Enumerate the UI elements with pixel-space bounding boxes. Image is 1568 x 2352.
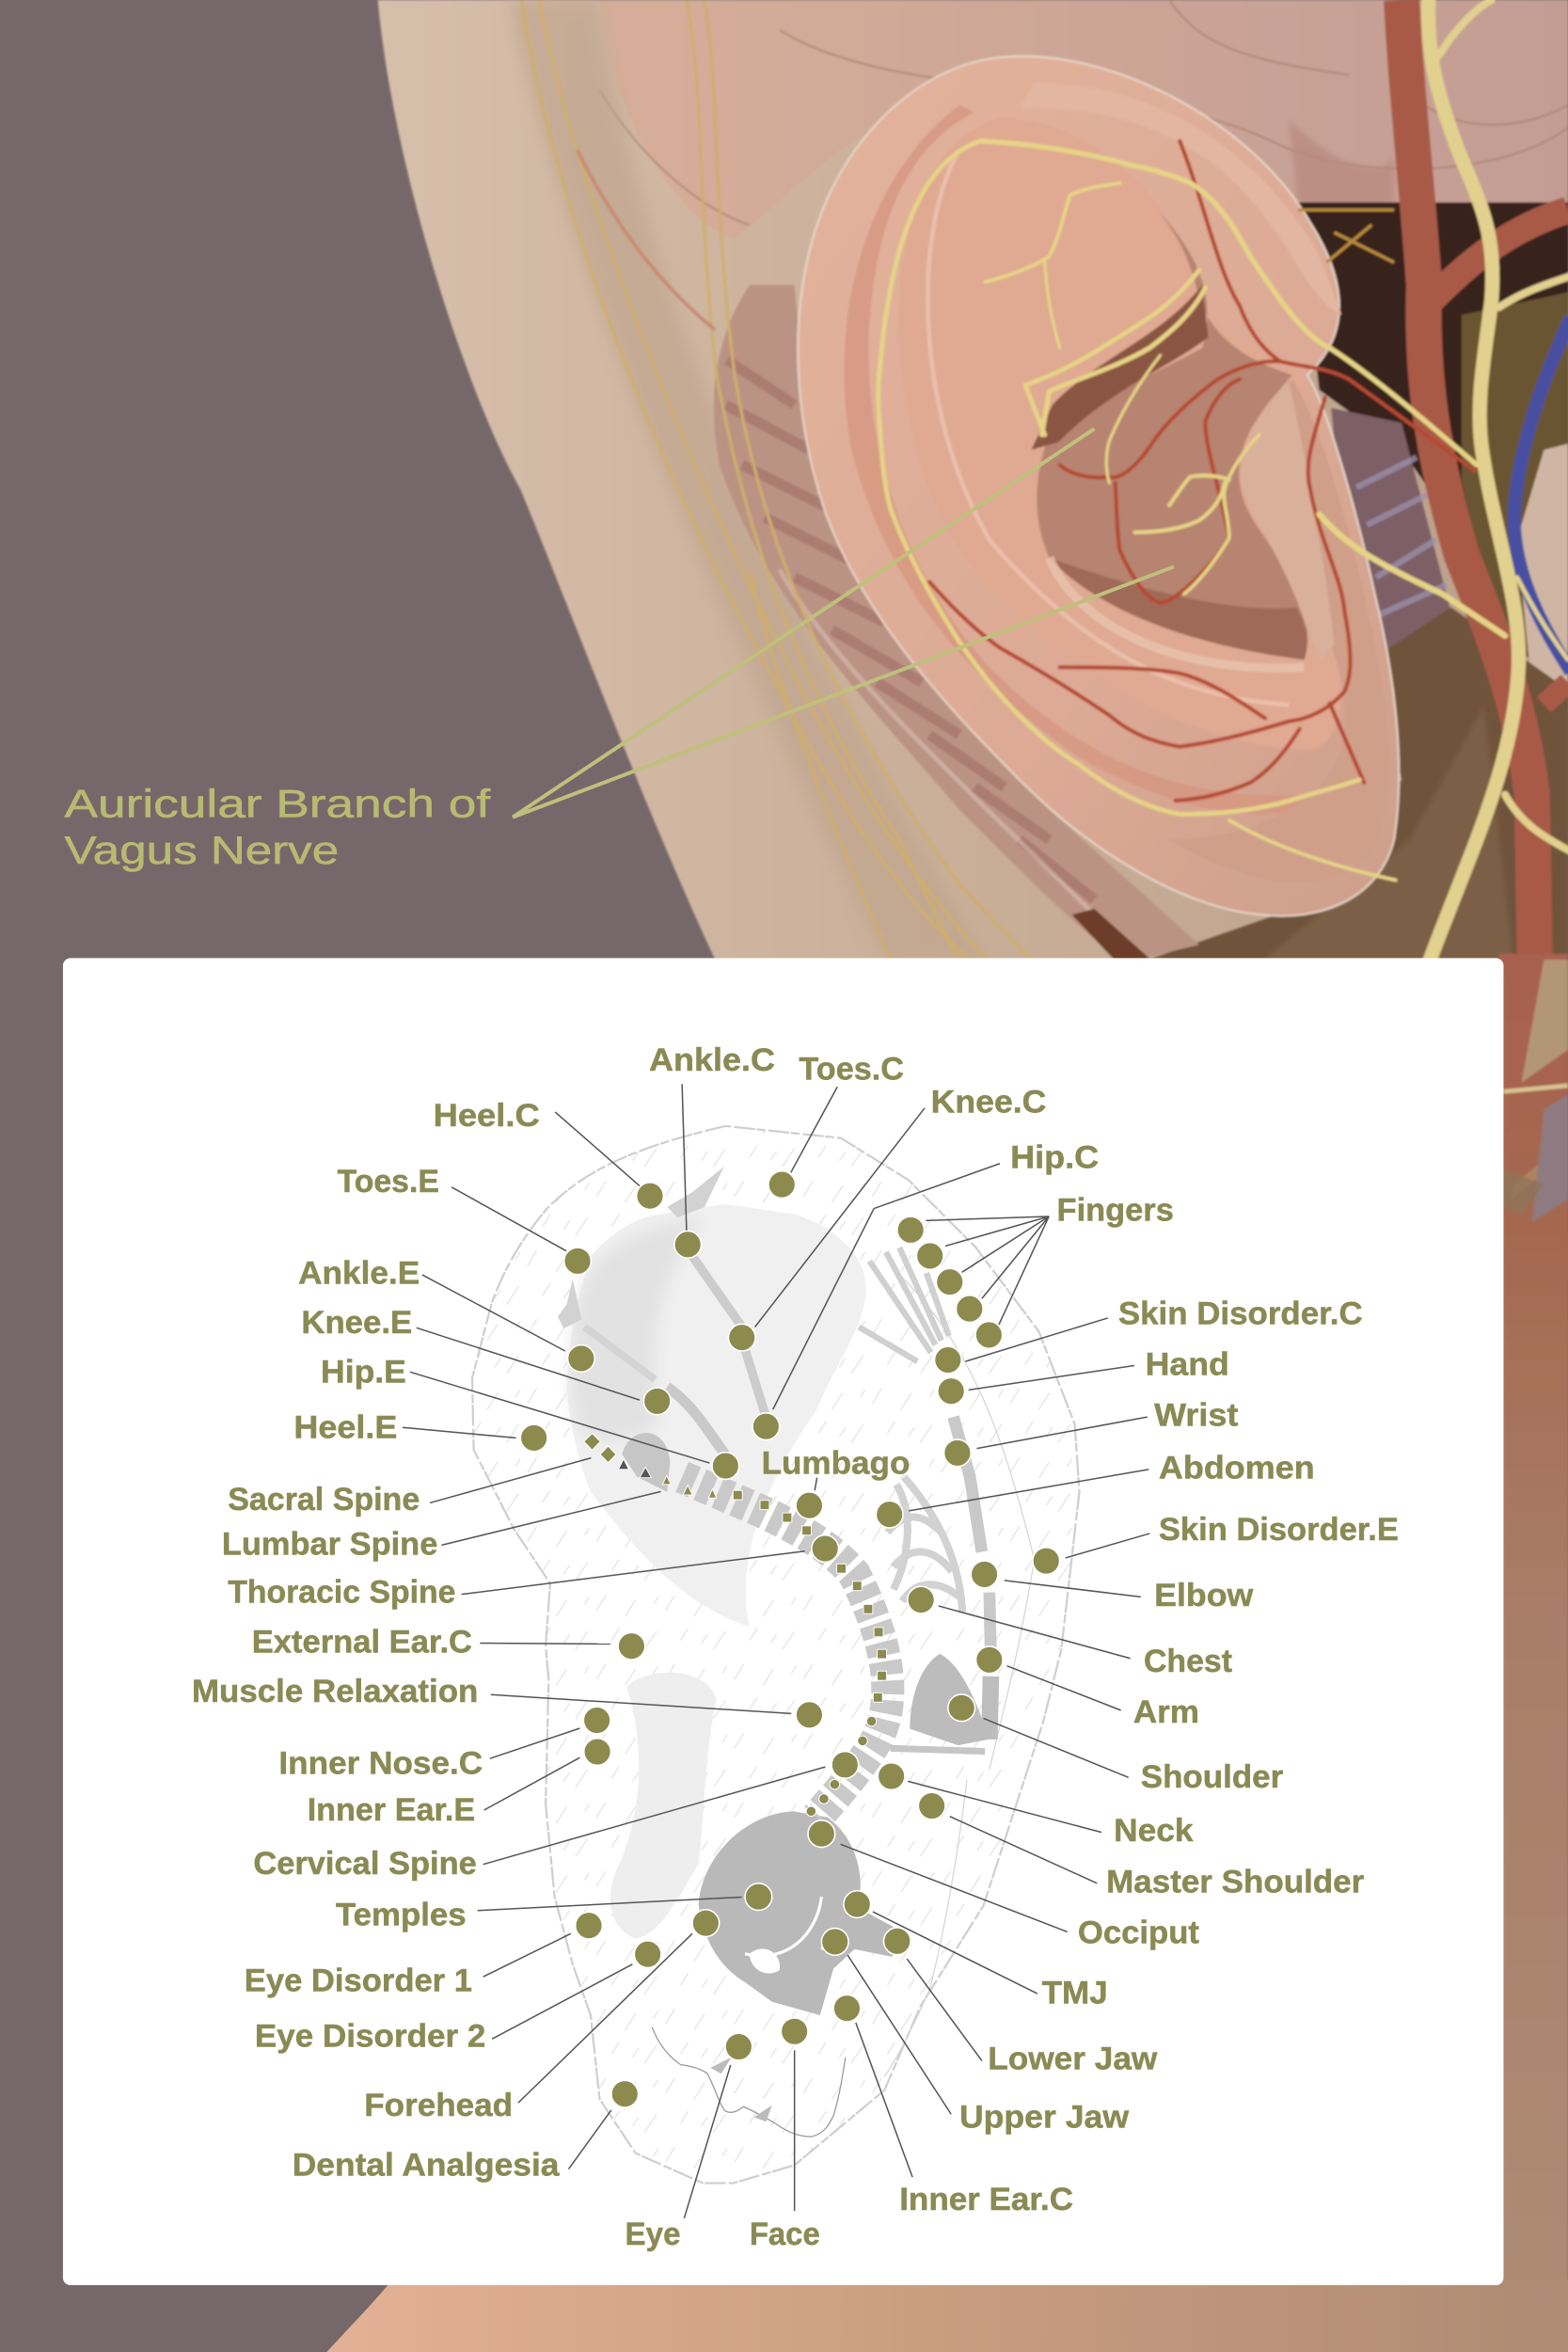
label: Abdomen — [876, 1450, 1315, 1528]
label: Knee.C: Knee.C — [931, 1085, 1046, 1120]
label: Master Shoulder: Master Shoulder — [1106, 1864, 1364, 1899]
label: TMJ: TMJ — [1042, 1975, 1108, 2010]
outer ear outline — [472, 1126, 1079, 2184]
ear sketch — [472, 1126, 1079, 2184]
label: Chest — [908, 1586, 1232, 1679]
label: Hip.C — [752, 1140, 1099, 1440]
label: Eye Disorder 1: Eye Disorder 1 — [245, 1963, 472, 1999]
label: Toes.E: Toes.E — [338, 1164, 439, 1200]
callout lines — [513, 429, 1174, 818]
label: Shoulder: Shoulder — [1141, 1759, 1283, 1795]
shaded antitragus area — [610, 1673, 717, 1939]
label: Fingers — [897, 1192, 1174, 1348]
label: Knee.E — [301, 1305, 671, 1415]
shoulder skin — [326, 2280, 1568, 2352]
right tissue strip — [1499, 954, 1568, 2288]
label: Face: Face — [750, 2217, 820, 2252]
right ear rim — [1169, 379, 1389, 882]
label: Elbow — [971, 1561, 1254, 1613]
label: Muscle Relaxation — [192, 1674, 823, 1728]
label: Master Shoulder — [918, 1792, 1364, 1899]
label: Eye Disorder 1 — [245, 1912, 602, 1999]
label: Sacral Spine — [228, 1458, 591, 1518]
label: Lumbago: Lumbago — [762, 1446, 910, 1482]
label: Lumbar Spine: Lumbar Spine — [222, 1527, 437, 1563]
neck skin — [378, 0, 1568, 962]
label: Heel.E — [293, 1409, 547, 1452]
label: Lower Jaw: Lower Jaw — [988, 2041, 1158, 2076]
label: Elbow: Elbow — [1154, 1578, 1254, 1613]
label: Neck: Neck — [1114, 1813, 1195, 1849]
label: Ankle.E — [298, 1255, 594, 1372]
concha — [1037, 210, 1307, 660]
label: Temples — [336, 1883, 772, 1932]
neck nerves — [522, 0, 1035, 962]
label: Toes.C — [768, 1052, 904, 1198]
label: Eye Disorder 2 — [255, 1941, 661, 2055]
callout title — [65, 782, 491, 872]
striped muscle behind ear — [1331, 408, 1451, 660]
blue vein — [1514, 318, 1568, 672]
label: Face — [750, 2018, 820, 2252]
label: Lower Jaw — [883, 1928, 1158, 2076]
label: Hand: Hand — [1146, 1346, 1229, 1382]
label: Inner Ear.E: Inner Ear.E — [308, 1792, 475, 1828]
striped muscle beneath ear — [714, 285, 1199, 962]
label: Heel.E: Heel.E — [293, 1409, 397, 1445]
label: Dental Analgesia: Dental Analgesia — [293, 2148, 560, 2184]
panel background — [63, 958, 1503, 2285]
ear arteries — [929, 141, 1475, 801]
upper foot — [667, 1167, 724, 1217]
label: Hand — [938, 1346, 1229, 1405]
label: Inner Ear.E — [308, 1739, 610, 1828]
label: Forehead — [364, 1910, 720, 2123]
label: Upper Jaw — [821, 1929, 1129, 2136]
label: Neck — [878, 1763, 1195, 1849]
label: Abdomen: Abdomen — [1159, 1450, 1315, 1486]
label: Cervical Spine: Cervical Spine — [253, 1846, 477, 1882]
lower leg bones — [667, 1387, 730, 1462]
label: Inner Ear.C — [833, 1994, 1073, 2217]
ear nerves — [879, 141, 1505, 881]
label: Knee.C — [728, 1085, 1046, 1351]
label: Arm: Arm — [1133, 1694, 1199, 1730]
spine markers — [584, 1434, 887, 1817]
gold-brown tissue — [1462, 293, 1568, 675]
label: Ankle.C: Ankle.C — [649, 1042, 775, 1078]
skeleton — [558, 1167, 990, 2015]
label: Heel.C: Heel.C — [434, 1098, 540, 1134]
panel: auricular points chart — [63, 958, 1503, 2285]
label: Cervical Spine — [253, 1752, 859, 1882]
lower brown tissue — [1139, 607, 1568, 962]
label: TMJ — [844, 1891, 1108, 2010]
tragus highlight — [1241, 382, 1334, 660]
label: Toes.C: Toes.C — [799, 1052, 904, 1088]
label: Thoracic Spine — [228, 1535, 839, 1611]
label: Thoracic Spine: Thoracic Spine — [228, 1575, 455, 1611]
label: Dental Analgesia — [293, 2080, 639, 2184]
label: Sacral Spine: Sacral Spine — [228, 1482, 420, 1518]
label: Fingers: Fingers — [1057, 1192, 1174, 1228]
face skin — [599, 0, 1568, 240]
label: Muscle Relaxation: Muscle Relaxation — [192, 1674, 478, 1709]
ear hatching — [472, 1126, 1079, 2184]
label: Heel.C — [434, 1098, 663, 1210]
label: Lumbago — [762, 1446, 910, 1518]
ear — [798, 56, 1399, 916]
label: Inner Ear.C: Inner Ear.C — [899, 2182, 1073, 2217]
label: Hip.E — [321, 1354, 739, 1479]
label: Knee.E: Knee.E — [301, 1305, 412, 1341]
label: External Ear.C — [252, 1624, 645, 1660]
label: Occiput — [808, 1820, 1199, 1951]
concha dark fold — [1031, 285, 1209, 450]
upper ear bowl — [899, 117, 1341, 750]
label: Toes.E — [338, 1164, 591, 1275]
spine — [682, 1477, 888, 1818]
clavicle — [891, 1748, 985, 1752]
label: Wrist — [944, 1398, 1238, 1467]
label: Skin Disorder.C: Skin Disorder.C — [1118, 1295, 1363, 1331]
tan bone — [1517, 444, 1568, 750]
shaded antihelix area — [566, 1204, 866, 1627]
label: Arm — [975, 1646, 1199, 1730]
label: Upper Jaw: Upper Jaw — [959, 2100, 1129, 2136]
label: Skin Disorder.E: Skin Disorder.E — [1159, 1512, 1399, 1548]
callout title: Vagus Nerve — [65, 828, 339, 872]
label: Ankle.E: Ankle.E — [298, 1255, 420, 1291]
label: Inner Nose.C — [278, 1707, 610, 1781]
label: Wrist: Wrist — [1154, 1398, 1238, 1434]
skull — [699, 1811, 907, 2015]
label: Inner Nose.C: Inner Nose.C — [278, 1745, 483, 1781]
scapula — [910, 1654, 990, 1745]
label: Occiput: Occiput — [1078, 1915, 1199, 1951]
label: Lumbar Spine — [222, 1491, 660, 1563]
label: External Ear.C: External Ear.C — [252, 1624, 472, 1660]
label: Skin Disorder.C — [935, 1295, 1363, 1374]
hand bones — [859, 1248, 949, 1361]
label: Skin Disorder.E — [1033, 1512, 1399, 1574]
upper leg bones — [692, 1257, 766, 1417]
ear outer shell — [798, 56, 1399, 916]
face outline — [652, 2027, 846, 2137]
neck fold shading — [510, 0, 990, 962]
label: Eye — [626, 2033, 752, 2252]
label: Chest: Chest — [1144, 1644, 1232, 1679]
big arteries — [1402, 0, 1568, 975]
gold nerve fragments behind ear — [1298, 210, 1394, 262]
label: Hip.C: Hip.C — [1010, 1140, 1099, 1176]
helix fold — [844, 105, 1334, 815]
label: Forehead: Forehead — [364, 2088, 513, 2123]
antihelix ridge — [927, 150, 1290, 705]
label: Hip.E: Hip.E — [321, 1354, 406, 1390]
label: Eye Disorder 2: Eye Disorder 2 — [255, 2019, 485, 2055]
ribs — [887, 1477, 962, 1612]
anatomical illustration: head and ear — [378, 0, 1568, 975]
arm bones — [954, 1417, 982, 1552]
callout title: Auricular Branch of — [65, 782, 491, 826]
label: Ankle.C — [649, 1042, 775, 1258]
label: Temples: Temples — [336, 1897, 467, 1932]
sacrum — [622, 1433, 670, 1492]
reddish neck vessel — [578, 150, 715, 330]
dark cavity behind ear — [1298, 202, 1568, 690]
lower foot — [558, 1279, 581, 1328]
label: Shoulder — [948, 1694, 1283, 1795]
label: Eye: Eye — [626, 2217, 681, 2252]
main nerve trunk — [1429, 0, 1568, 960]
